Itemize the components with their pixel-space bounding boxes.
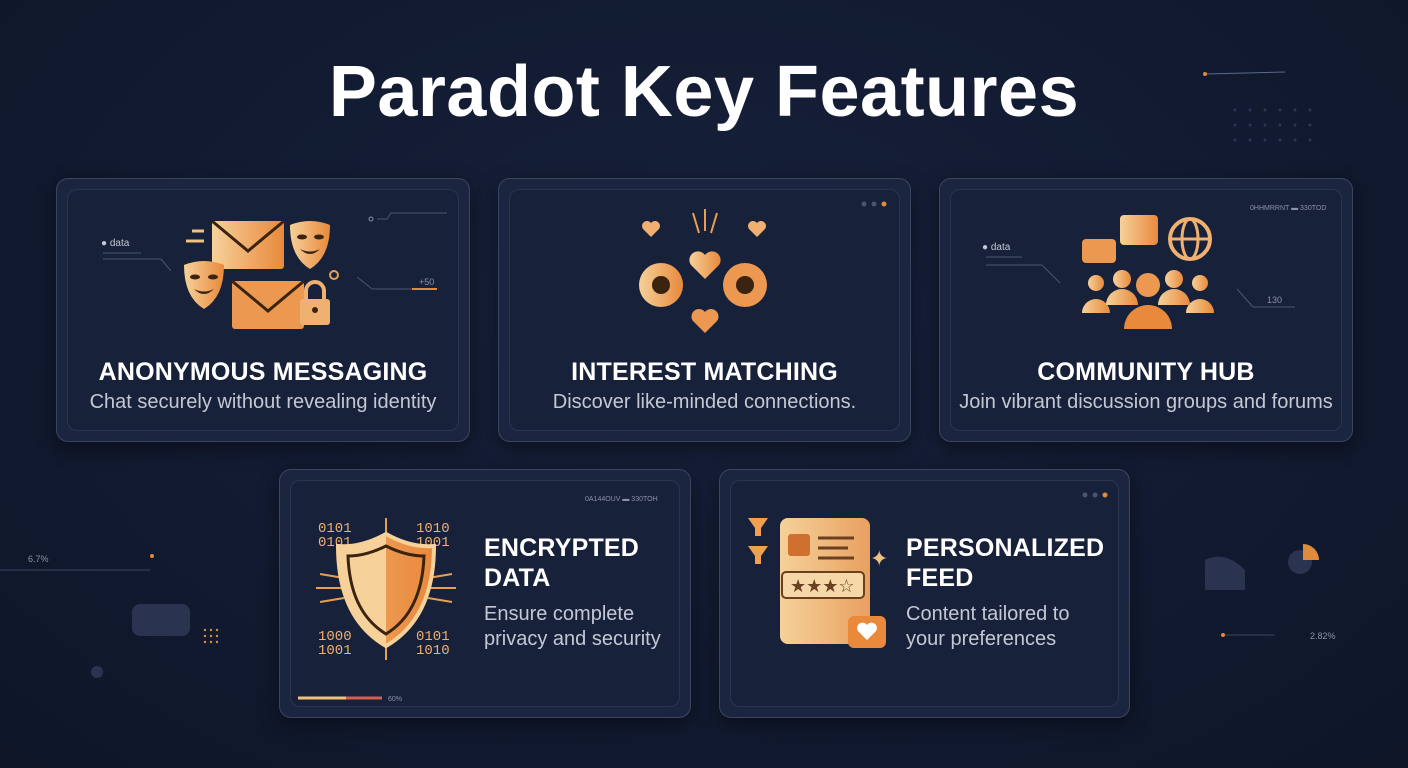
icon: shield with circuits: 0101: [318, 535, 352, 551]
panel: anonymous messaging: ● data: [101, 238, 129, 249]
panel: interest matching: Discover like-minded connections.: [553, 391, 856, 413]
panel: encrypted data: DATA: [484, 564, 551, 592]
icon: community people with chat bubbles and globe: [1082, 215, 1214, 329]
panel: anonymous messaging: Chat securely without revealing identity: [90, 391, 436, 413]
panel: personalized feed: FEED: [906, 564, 973, 592]
icon: shield with circuits: [316, 518, 456, 660]
icon: shield with circuits: 1000: [318, 629, 352, 645]
decoration: right side: 2.82%: [1310, 631, 1336, 641]
panel: community hub: Join vibrant discussion groups and forums: [959, 391, 1333, 413]
icon: shield with circuits: 0101: [416, 629, 450, 645]
panel: interest matching: INTEREST MATCHING: [571, 358, 838, 386]
icon: feed document with stars and filter: [748, 518, 888, 648]
decoration: right side: [1205, 544, 1336, 641]
panel: anonymous messaging: +50: [419, 277, 434, 287]
panel: encrypted data: ENCRYPTED: [484, 534, 639, 562]
icon: shield with circuits: 1001: [318, 643, 352, 659]
icon: feed document with stars and filter: ✦: [870, 546, 888, 571]
panel: interest matching: [498, 178, 911, 442]
title: Paradot Key Features: [329, 52, 1079, 132]
icon: shield with circuits: 1010: [416, 643, 450, 659]
panel: personalized feed: [719, 469, 1130, 718]
panel: personalized feed: your preferences: [906, 628, 1056, 650]
panel: community hub: 0HHMRRNT ▬ 330TOD: [1250, 205, 1326, 212]
decoration: left side: 6.7%: [28, 554, 49, 564]
panel: anonymous messaging: [56, 178, 470, 442]
panel: personalized feed: Content tailored to: [906, 603, 1069, 625]
icon: feed document with stars and filter: ★★★☆: [790, 576, 855, 596]
panel: community hub: [939, 178, 1353, 442]
icon: gears and hearts: [639, 209, 767, 333]
panel: encrypted data: privacy and security: [484, 628, 661, 650]
panel: anonymous messaging: ANONYMOUS MESSAGING: [99, 358, 427, 386]
decoration: left side: [0, 554, 218, 678]
decoration: dots grid top right: [1203, 72, 1312, 142]
panel: personalized feed: PERSONALIZED: [906, 534, 1104, 562]
icon: shield with circuits: 0101: [318, 521, 352, 537]
icon: shield with circuits: 1010: [416, 521, 450, 537]
panel: encrypted data: 0A144OUV ▬ 330TOH: [585, 496, 658, 503]
icon: envelopes masks lock: [184, 220, 339, 329]
panel: community hub: ● data: [982, 242, 1010, 253]
panel: encrypted data: Ensure complete: [484, 603, 634, 625]
panel: encrypted data: [279, 469, 691, 718]
panel: community hub: COMMUNITY HUB: [1037, 358, 1255, 386]
icon: shield with circuits: 1001: [416, 535, 450, 551]
panel: community hub: 130: [1267, 295, 1282, 305]
panel: encrypted data: 60%: [388, 696, 402, 703]
